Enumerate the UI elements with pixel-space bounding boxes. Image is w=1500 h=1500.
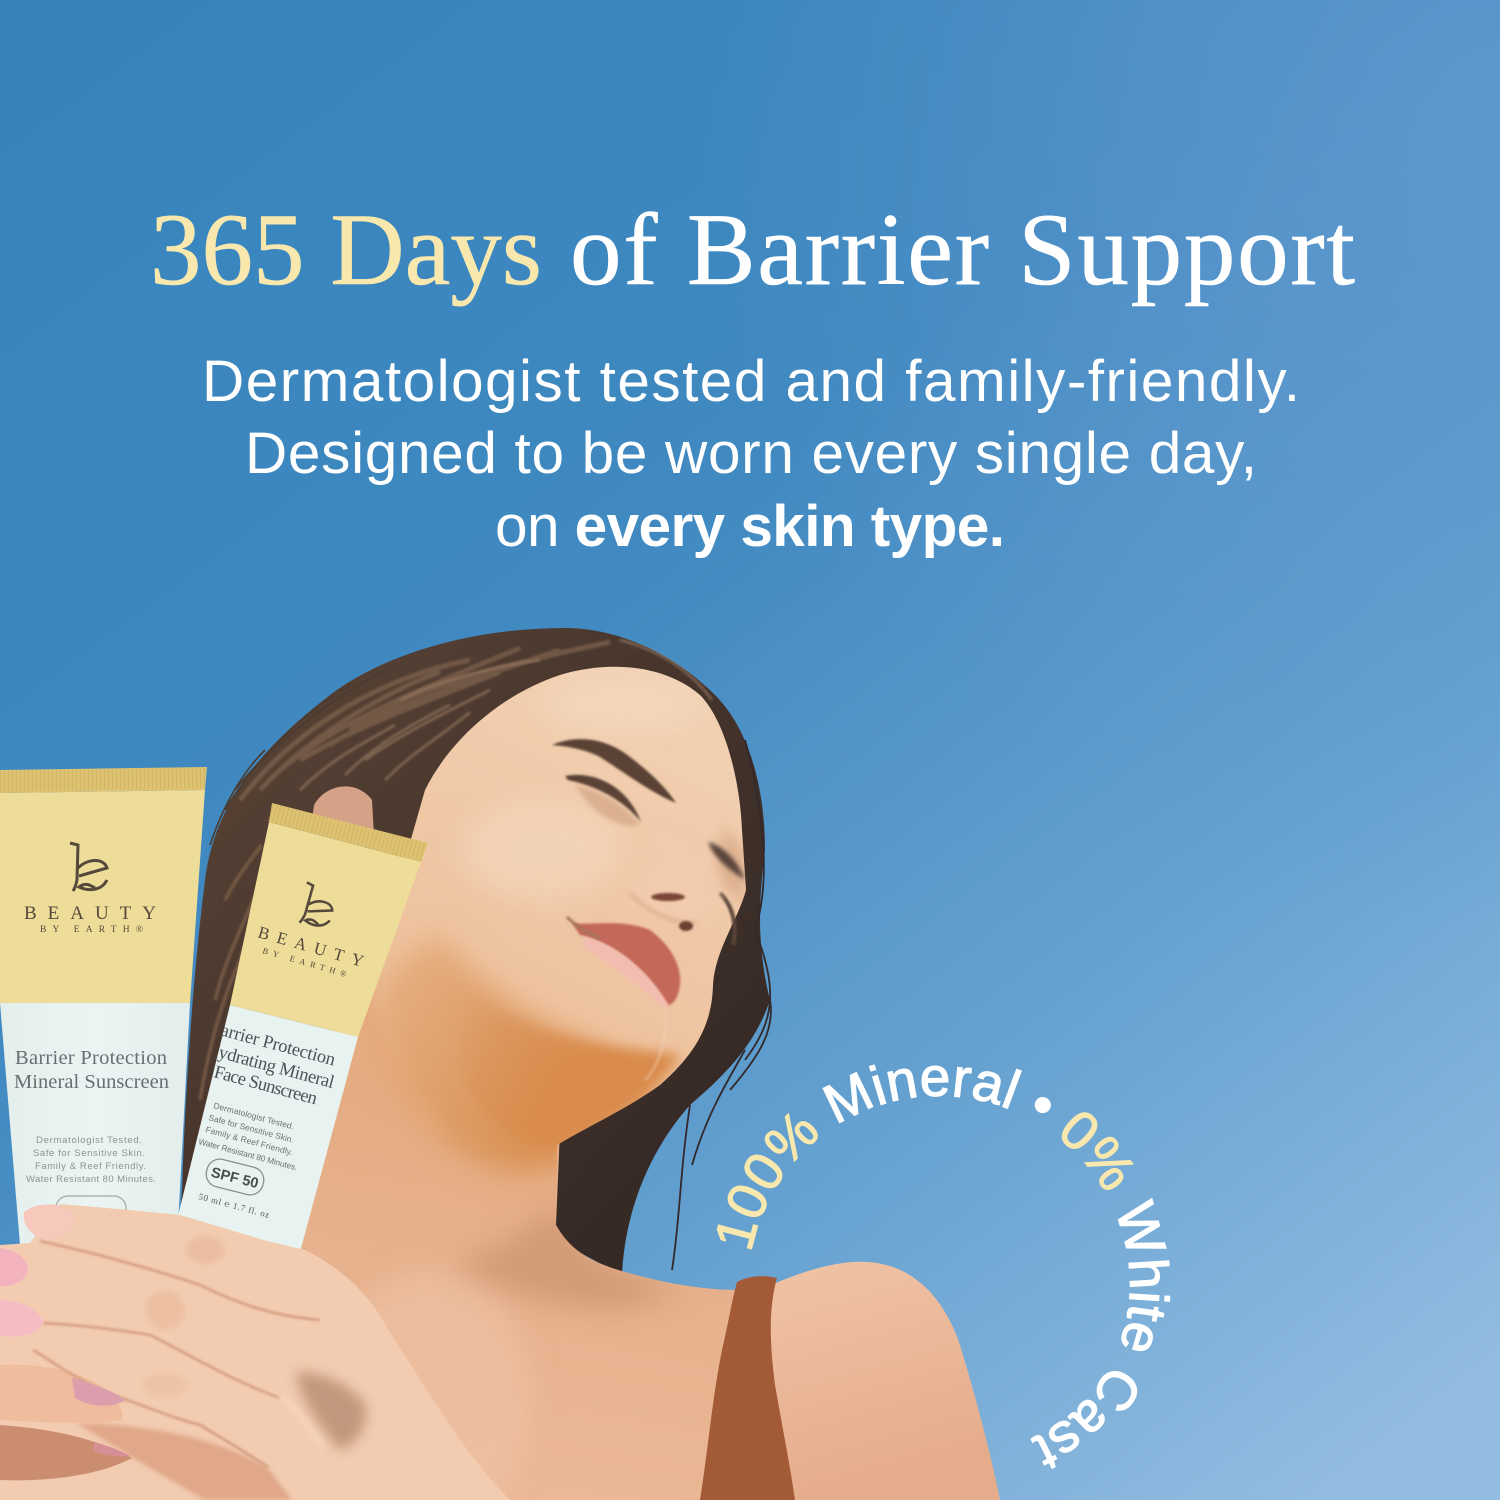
under-jaw shadow soft bbox=[375, 935, 660, 1171]
hair bbox=[180, 628, 771, 1275]
product name: Barrier Protection bbox=[207, 1018, 337, 1070]
nose bbox=[628, 830, 718, 931]
product name bbox=[214, 1028, 334, 1104]
product name bbox=[14, 1047, 169, 1093]
hand holding tubes bbox=[0, 1204, 510, 1500]
product claims: Safe for Sensitive Skin. bbox=[33, 1148, 145, 1159]
brand logo: BY EARTH® bbox=[40, 924, 143, 935]
SPF badge: SPF 50 bbox=[209, 1165, 260, 1192]
product claims: Safe for Sensitive Skin. bbox=[207, 1112, 295, 1145]
neck and chest bbox=[100, 900, 800, 1500]
product claims: Water Resistant 80 Minutes. bbox=[26, 1174, 156, 1185]
face bbox=[374, 666, 746, 1314]
eyes and eyebrows bbox=[552, 739, 745, 945]
lower finger in shadow bbox=[77, 1423, 292, 1500]
product claims: Family & Reef Friendly. bbox=[204, 1124, 294, 1157]
subtitle text bbox=[202, 349, 1300, 559]
product claims: Water Resistant 80 Minutes. bbox=[197, 1136, 299, 1172]
lower fingers bbox=[0, 1365, 123, 1423]
subtitle text: Designed to be worn every single day, bbox=[245, 421, 1257, 486]
title bbox=[150, 193, 1355, 307]
shoulder bbox=[750, 1262, 1000, 1500]
volume: 50 ml ℮ 1.7 fl. oz bbox=[197, 1191, 271, 1220]
brand logo: BEAUTY bbox=[24, 903, 156, 924]
under-jaw shadow near chin bbox=[472, 1016, 684, 1145]
brand logo bbox=[24, 843, 156, 935]
product: small SPF 50 tube bbox=[176, 803, 428, 1252]
curved claim: 100% Mineral, 0% White Cast: 100% Mineral • 0% White Cast bbox=[716, 1064, 1170, 1469]
ear bbox=[312, 786, 374, 835]
product claims: Dermatologist Tested. bbox=[36, 1135, 142, 1146]
SPF badge bbox=[206, 1158, 264, 1196]
title: 365 Days bbox=[150, 193, 542, 307]
product claims bbox=[26, 1135, 156, 1185]
title: of Barrier Support bbox=[570, 193, 1355, 307]
lips bbox=[567, 917, 680, 1008]
product name: Hydrating Mineral bbox=[204, 1040, 336, 1093]
product claims: Dermatologist Tested. bbox=[212, 1100, 295, 1131]
model portrait bbox=[100, 620, 1000, 1500]
chin crease bbox=[645, 1010, 666, 1080]
product name: Barrier Protection bbox=[15, 1047, 167, 1069]
product name: Face Sunscreen bbox=[212, 1063, 319, 1109]
product claims bbox=[197, 1100, 299, 1172]
product name: Mineral Sunscreen bbox=[14, 1071, 169, 1093]
knuckle shadow bbox=[296, 1372, 366, 1450]
brand logo: BEAUTY bbox=[256, 923, 366, 971]
fingernails bbox=[0, 1204, 130, 1457]
brand logo: BY EARTH® bbox=[261, 945, 348, 979]
subtitle text: Dermatologist tested and family-friendly. bbox=[202, 349, 1300, 414]
swimsuit strap bbox=[700, 1276, 795, 1500]
product: large sunscreen tube bbox=[0, 767, 207, 1245]
brand logo bbox=[256, 882, 366, 979]
finger gaps bbox=[33, 1241, 320, 1467]
product claims: Family & Reef Friendly. bbox=[35, 1161, 146, 1172]
subtitle text: on every skin type. bbox=[495, 494, 1005, 559]
